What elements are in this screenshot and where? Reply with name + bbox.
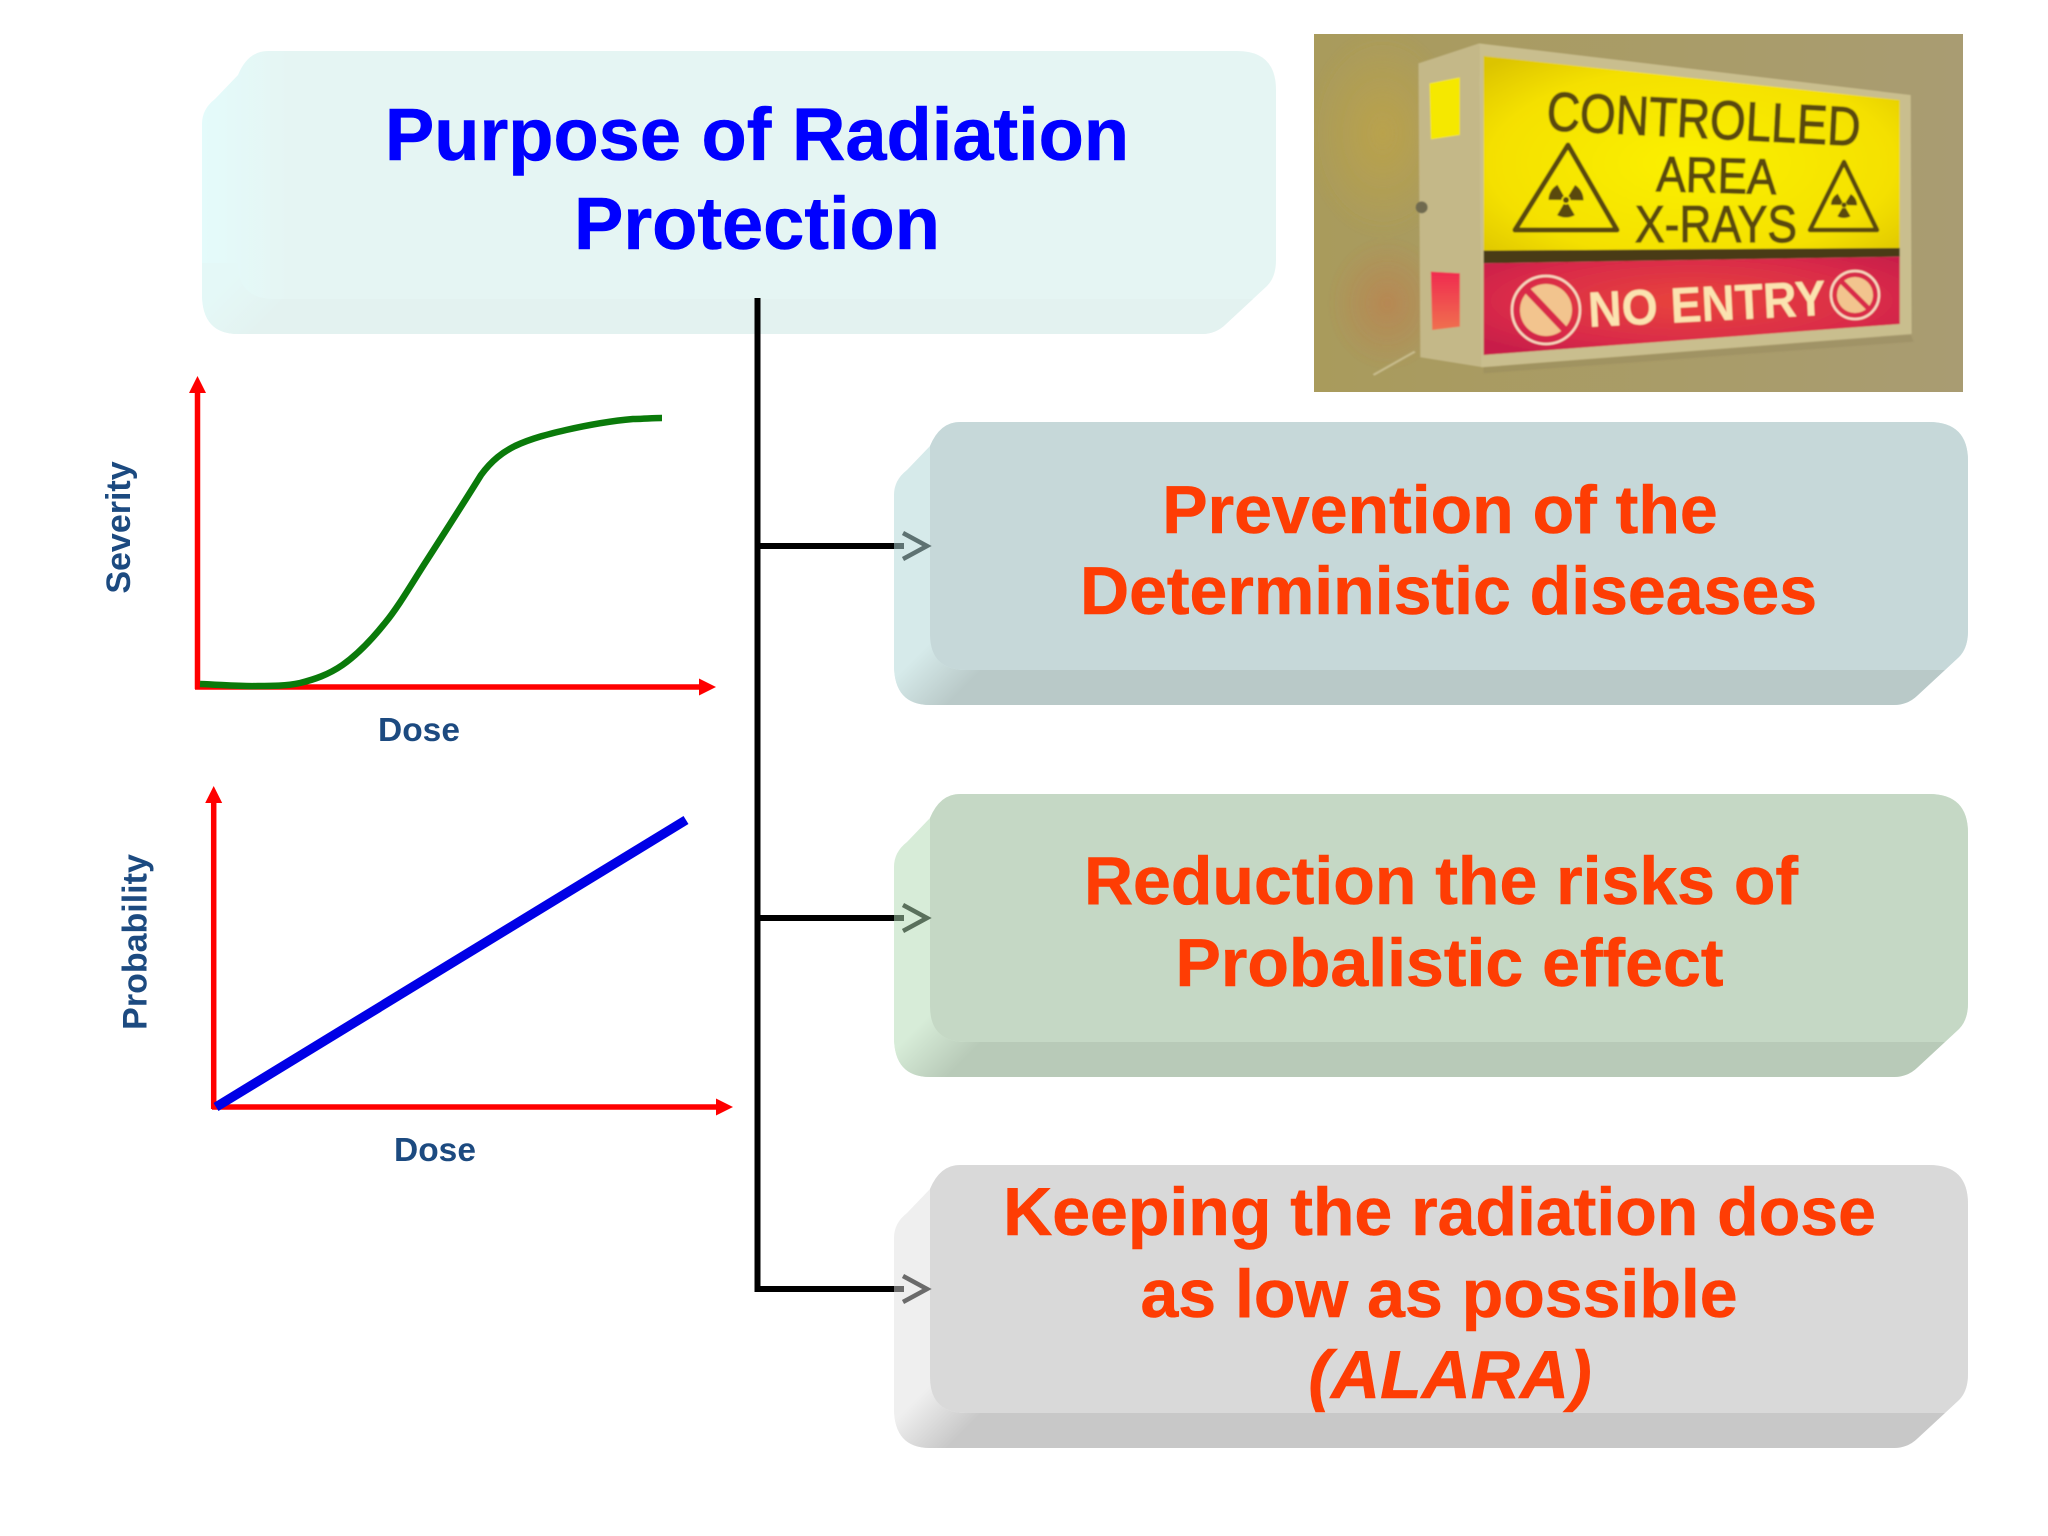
panel: reduction of probabilistic risk: Probalistic effect: [1176, 925, 1723, 1001]
linear line: [216, 820, 686, 1107]
panel: prevention of deterministic diseases: [894, 422, 1968, 705]
panel: ALARA: as low as possible: [1140, 1256, 1738, 1332]
title text: Purpose of Radiation: [385, 93, 1129, 176]
y axis arrow: [189, 376, 206, 689]
axis label: probability: Probability: [116, 854, 154, 1030]
photo: controlled area x-rays warning sign: [1305, 27, 1963, 392]
chart: probability versus dose (stochastic): [116, 786, 733, 1169]
panel: prevention of deterministic diseases: Deterministic diseases: [1080, 553, 1817, 629]
arrow: to ALARA panel: [755, 1276, 927, 1302]
panel: ALARA: [894, 1165, 1968, 1448]
text: reduction: Reduction the risks of: [1084, 843, 1798, 919]
axis label: dose: Dose: [378, 712, 460, 749]
chart: severity versus dose (deterministic): [100, 376, 716, 749]
sign wording: [1548, 91, 1860, 244]
sigmoid curve: [200, 418, 662, 686]
title panel: Purpose of Radiation Protection: Protection: [574, 182, 940, 265]
arrow: to reduction panel: [755, 905, 927, 931]
icon: no entry circles: [1512, 271, 1879, 344]
x axis arrow: [212, 1098, 733, 1116]
y axis arrow: [205, 786, 222, 1109]
axis label: severity: Severity: [100, 461, 138, 594]
photo: controlled area x-rays warning sign: NO ENTRY: [1587, 270, 1827, 338]
title panel: Purpose of Radiation Protection: [202, 51, 1276, 334]
arrow: to prevention panel: [755, 533, 927, 559]
text: ALARA: Keeping the radiation dose: [1003, 1174, 1876, 1250]
x axis arrow: [195, 678, 716, 696]
panel: reduction of probabilistic risk: [894, 794, 1968, 1077]
icon: radiation triangles: [1515, 145, 1877, 230]
panel: ALARA: (ALARA): [1308, 1337, 1592, 1413]
sign wording: AREA: [1656, 146, 1778, 205]
sign wording: CONTROLLED: [1545, 80, 1862, 158]
connector: vertical trunk: [754, 298, 760, 1292]
sign wording: X-RAYS: [1635, 196, 1797, 254]
axis label: dose: Dose: [394, 1132, 476, 1169]
text: prevention: Prevention of the: [1162, 472, 1718, 548]
